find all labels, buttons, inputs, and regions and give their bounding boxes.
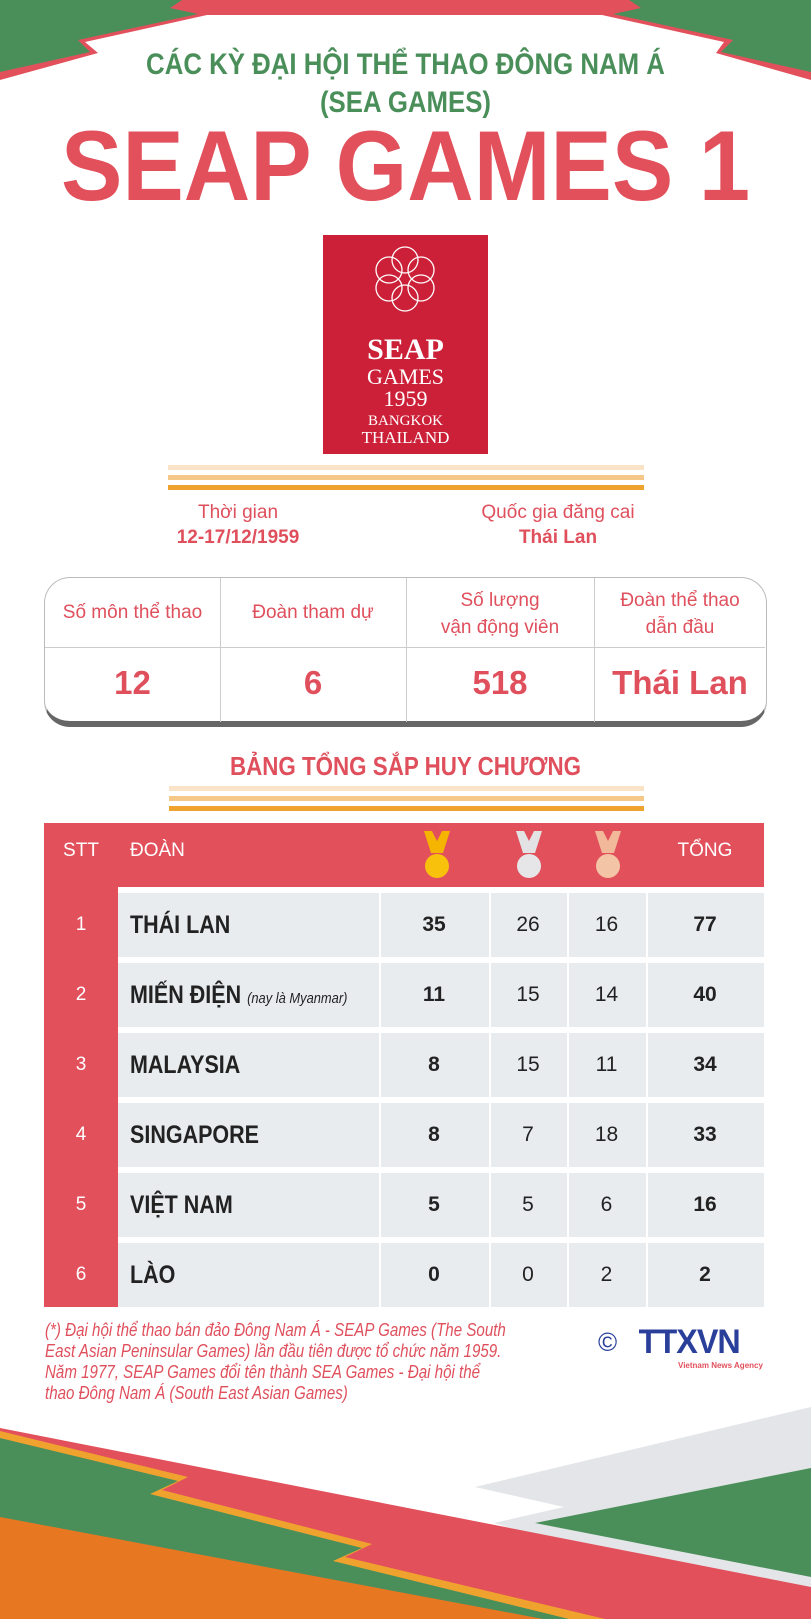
stats box: Đoàn thể thao [620, 590, 740, 611]
logo text: 1959 [384, 386, 428, 411]
footnote: Năm 1977, SEAP Games đổi tên thành SEA Games - Đại hội thể [45, 1362, 480, 1382]
subtitle: CÁC KỲ ĐẠI HỘI THỂ THAO ĐÔNG NAM Á [146, 48, 665, 81]
stripes 2 [169, 786, 644, 811]
row 1: 26 [516, 913, 540, 936]
footnote: East Asian Peninsular Games) lần đầu tiên được tổ chức năm 1959. [45, 1341, 501, 1361]
icon: gold medal [424, 831, 450, 878]
row 2 [76, 963, 764, 1027]
logo text: BANGKOK [368, 413, 443, 429]
stats box: Đoàn tham dự [252, 602, 374, 623]
logo text: SEAP [367, 333, 444, 366]
logo: TTXVN: Vietnam News Agency [678, 1361, 763, 1370]
icon: bronze medal [595, 831, 621, 878]
row 2: 2 [76, 984, 86, 1005]
row 4: 7 [522, 1123, 534, 1146]
logo: TTXVN: © [598, 1327, 617, 1357]
row 3 [76, 1033, 764, 1097]
footnote: (*) Đại hội thể thao bán đảo Đông Nam Á - SEAP Games (The South [45, 1320, 506, 1340]
row 1: THÁI LAN [130, 911, 230, 939]
row 5: VIỆT NAM [130, 1191, 233, 1219]
logo [323, 235, 488, 454]
row 6 [76, 1243, 764, 1307]
icon: flower rings [375, 246, 435, 312]
row 6: LÀO [130, 1261, 175, 1289]
logo: TTXVN [598, 1323, 763, 1370]
logo: TTXVN: TTXVN [639, 1323, 740, 1361]
row 4: 33 [693, 1123, 717, 1146]
stats box [44, 577, 767, 727]
top decoration [0, 0, 811, 80]
info: host: Thái Lan [519, 527, 597, 548]
bottom decoration [0, 1407, 811, 1619]
row 3: 11 [596, 1053, 617, 1076]
medal table heading: BẢNG TỔNG SẮP HUY CHƯƠNG [230, 751, 581, 781]
row 1: 77 [693, 913, 717, 936]
row 4: 4 [76, 1124, 86, 1145]
stats box: 518 [472, 664, 528, 701]
row 6: 6 [76, 1264, 86, 1285]
medal table: TỔNG [678, 840, 732, 861]
stats box: Thái Lan [612, 664, 748, 701]
row 6: 0 [428, 1263, 440, 1286]
footnote [45, 1320, 506, 1403]
subtitle [146, 47, 665, 119]
row 4: SINGAPORE [130, 1121, 259, 1149]
stats box: vận động viên [441, 617, 559, 638]
info: host: Quốc gia đăng cai [481, 502, 635, 523]
medal table: ĐOÀN [130, 840, 185, 861]
info: time: Thời gian [198, 502, 278, 523]
row 3: 15 [516, 1053, 540, 1076]
footnote: thao Đông Nam Á (South East Asian Games) [45, 1383, 348, 1403]
row 4: 18 [595, 1123, 618, 1146]
row 5: 5 [522, 1193, 534, 1216]
logo text: GAMES [367, 364, 444, 389]
row 5 [76, 1173, 764, 1237]
row 5: 6 [601, 1193, 612, 1216]
row 3: 3 [76, 1054, 86, 1075]
table header: STT [63, 840, 99, 861]
icon: silver medal [516, 831, 542, 878]
row 1: 35 [422, 913, 446, 936]
row 1 [76, 893, 764, 957]
row 5: 5 [428, 1193, 440, 1216]
logo text [362, 333, 449, 447]
stats box: dẫn đầu [646, 617, 714, 638]
row 2: 15 [516, 983, 540, 1006]
row 3: 8 [428, 1053, 440, 1076]
stat headers: Số môn thể thao [63, 602, 202, 623]
row 2: 14 [595, 983, 618, 1006]
stripes 1 [168, 465, 644, 490]
row 4: 8 [428, 1123, 440, 1146]
row 5: 5 [76, 1194, 86, 1215]
logo text: THAILAND [362, 428, 449, 447]
info: time: 12-17/12/1959 [177, 527, 299, 548]
row 3: 34 [693, 1053, 717, 1076]
row 3: MALAYSIA [130, 1051, 240, 1079]
info: time [177, 502, 299, 548]
row 6: 2 [601, 1263, 612, 1286]
row 2: MIẾN ĐIỆN (nay là Myanmar) [130, 981, 347, 1009]
row 1: 1 [76, 914, 86, 935]
stat values: 12 [114, 664, 151, 701]
subtitle: (SEA GAMES) [320, 86, 491, 119]
row 6: 2 [699, 1263, 711, 1286]
stats box: Số lượng [460, 590, 540, 611]
row 1: 16 [595, 913, 618, 936]
stats box: 6 [304, 664, 322, 701]
info: host [481, 502, 635, 548]
row 6: 0 [522, 1263, 534, 1286]
row 2: 11 [423, 983, 445, 1006]
row 2: 40 [693, 983, 717, 1006]
title: SEAP GAMES 1 [61, 110, 750, 221]
row 5: 16 [693, 1193, 717, 1216]
row 4 [76, 1103, 764, 1167]
